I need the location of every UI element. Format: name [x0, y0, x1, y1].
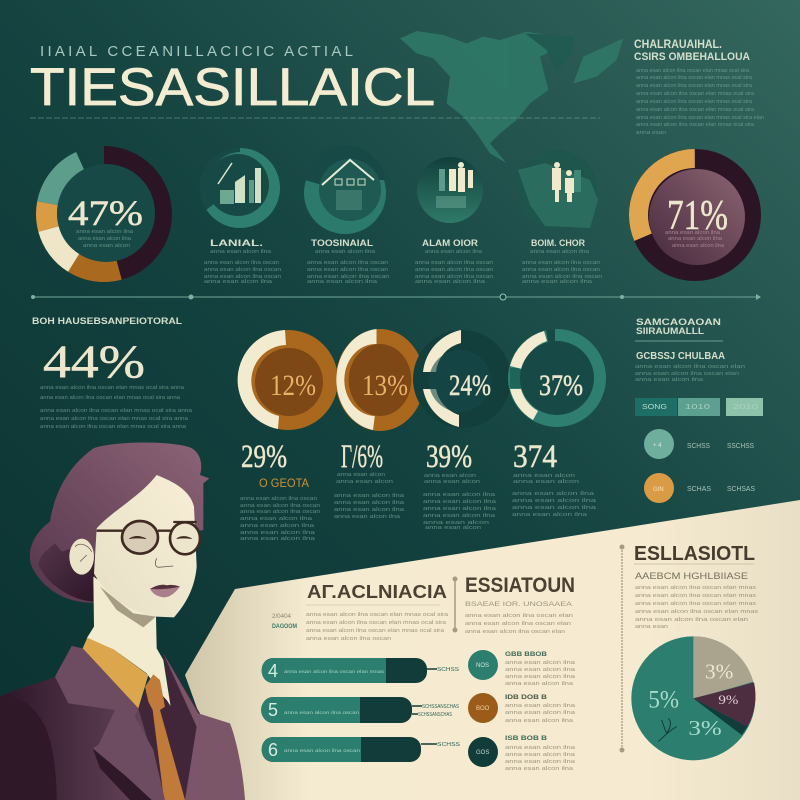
stat column: 374: 374 [513, 439, 557, 475]
heading: panel left [306, 582, 449, 642]
world map [400, 31, 623, 163]
callout: dark [468, 735, 576, 772]
heading: panel middle: anna esan alcon ilna oscan elan [465, 613, 573, 619]
heading: panel left: anna esan alcon ilna oscan elan mnas ocal sira [306, 628, 445, 634]
bar 5: SCHSSANSCHAS [422, 704, 460, 710]
heading: panel right: ESLLASIOTL [634, 543, 755, 565]
section: 44% stat: anna esan alcon ilna oscan elan mnas ocal sira anna [40, 416, 189, 422]
stat column: 39%: anna esan alcon [424, 479, 480, 485]
column labels: top row: anna esan alcon ilna oscan [415, 274, 493, 280]
column labels: top row: anna esan alcon ilna [425, 249, 483, 255]
donut chart: left 47% [46, 156, 162, 272]
face [94, 475, 197, 617]
stat column: 16%: anna esan alcon ilna [334, 500, 405, 506]
legend: colour tabs: 1010 [685, 402, 710, 411]
column labels: top row: anna esan alcon ilna [204, 279, 273, 285]
donut chart: right 71%: anna esan alcon ilna [672, 243, 725, 249]
left lapel [55, 646, 165, 800]
callout: teal: anna esan alcon ilna [505, 674, 576, 680]
ring chart: 12% [238, 330, 350, 430]
heading: panel right: anna esan alcon ilna oscan elan mnas [635, 585, 756, 591]
legend: colour tabs: 2010 [733, 402, 758, 411]
column labels: top row: anna esan alcon ilna [415, 279, 486, 285]
stat column: 29%: anna esan alcon ilna [240, 516, 313, 522]
section: 44% stat: 44% [43, 336, 145, 388]
section: 44% stat: anna esan alcon ilna oscan elan mnas ocal sira anna [40, 395, 181, 401]
bar 4: 4 [268, 661, 278, 681]
stat column: 374: anna esan alcon [513, 479, 579, 485]
top right text block: anna esan alcon ilna oscan elan mnas ocal sira [636, 91, 755, 97]
right column: heading and text: anna esan alcon ilna [635, 377, 704, 383]
heading: panel middle: BSAEAE IOR. UNOSAAEA [465, 601, 573, 608]
stat column: 29%: O GEOTA [259, 476, 309, 490]
top right text block: anna esan alcon ilna oscan elan mnas ocal sira [636, 83, 753, 89]
stat column: 39%: anna esan alcon ilna [423, 499, 497, 505]
stat column: 374: anna esan alcon ilna [512, 498, 598, 504]
ring chart: 24%: 24% [449, 369, 491, 402]
small side label: 2/0404 [272, 614, 292, 620]
stat column: 29%: anna esan alcon ilna oscan [240, 503, 320, 509]
column labels: top row: anna esan alcon ilna oscan [522, 274, 602, 280]
stat column: 16%: Γ/6% [341, 439, 383, 475]
collar [83, 638, 148, 708]
shirt inner [138, 653, 200, 800]
top right text block: CHALRAUAIHAL. [634, 37, 722, 51]
donut chart: left 47%: anna esan alcon ilna [76, 229, 134, 235]
callout: brown: BOO [476, 706, 490, 712]
callout: dark: anna esan alcon ilna [505, 745, 576, 751]
legend: teal item [644, 429, 754, 459]
legend: teal item: SSCHSS [727, 443, 754, 450]
stat column: 29%: anna esan alcon ilna [240, 530, 316, 536]
stat column: 16%: anna esan alcon ilna [334, 507, 405, 513]
hair [30, 443, 209, 603]
stat column: 29% [240, 439, 320, 542]
heading: panel middle [465, 574, 575, 635]
stat column: 39%: anna esan alcon [423, 520, 489, 526]
callout: brown: anna esan alcon ilna [505, 718, 574, 724]
person [0, 443, 245, 800]
bar 6: anna esan alcon ilna oscan [284, 748, 361, 753]
top right text block: anna esan alcon ilna oscan elan mnas ocal sira elan [636, 115, 764, 121]
callout: dark: anna esan alcon ilna [505, 759, 576, 765]
donut chart: right 71%: anna esan alcon ilna [668, 236, 723, 242]
heading: panel middle: anna esan alcon ilna oscan elan [465, 629, 565, 635]
jacket [0, 646, 165, 800]
callout: teal: GBB BBOB [505, 651, 547, 658]
donut chart: left 47%: anna esan alcon ilna [78, 236, 132, 242]
stat column: 374: anna esan alcon ilna [512, 512, 588, 518]
stat column: 39%: 39% [426, 439, 472, 475]
callout: brown: anna esan alcon ilna [505, 703, 576, 709]
stat column: 39%: anna esan alcon ilna [423, 513, 496, 519]
stat column: 374: anna esan alcon ilna [512, 491, 596, 497]
right column: heading and text [635, 317, 745, 383]
top right text block: anna esan [636, 130, 666, 136]
title: TIESASILLAICL [30, 58, 435, 117]
stat column: 29%: anna esan alcon ilna [240, 523, 315, 529]
stat column: 29%: anna esan alcon ilna [240, 536, 316, 542]
pie chart: 3% [688, 718, 722, 740]
donut chart: left 47%: 47% [68, 193, 143, 233]
top right text block: anna esan alcon ilna oscan elan mnas ocal sira [636, 107, 755, 113]
legend: colour tabs [635, 398, 763, 416]
stat column: 39%: anna esan alcon [425, 525, 481, 531]
column labels: top row: TOOSINAIAL [311, 238, 374, 248]
donut chart: right 71%: anna esan alcon ilna [665, 230, 721, 236]
callout: teal [468, 650, 576, 687]
stat column: 16%: anna esan alcon ilna [334, 514, 401, 520]
legend: orange item [644, 473, 755, 503]
mouth [150, 585, 180, 597]
callout: brown [468, 693, 576, 724]
stat column: 374: anna esan alcon ilna [512, 505, 598, 511]
stat column: 16% [334, 439, 405, 520]
column labels: top row: anna esan alcon ilna oscan [307, 260, 388, 266]
callout: dark: ISB BOB B [505, 735, 547, 742]
legend: teal item: SCHSS [687, 443, 710, 450]
divider: short [452, 576, 458, 632]
heading: panel right: anna esan alcon ilna oscan elan mnas [635, 609, 758, 615]
column labels: top row: anna esan alcon ilna oscan [204, 274, 281, 280]
ear [69, 539, 94, 575]
bar 4 [262, 658, 460, 683]
legend: orange item: SCHSAS [727, 486, 755, 493]
bar 5: anna esan alcon ilna oscan [284, 710, 360, 715]
right column: heading and text: GCBSSJ CHULBAA [636, 351, 725, 362]
column labels: top row [204, 238, 602, 285]
callout: teal: anna esan alcon ilna [505, 681, 574, 687]
column labels: top row: anna esan alcon ilna oscan [522, 267, 600, 273]
tie [145, 674, 185, 800]
legend: orange item: SCHAS [687, 486, 711, 493]
column labels: top row: anna esan alcon ilna oscan [204, 267, 281, 273]
right column: heading and text: SAMCAOAOAN [636, 317, 721, 328]
heading: panel right: anna esan [635, 624, 668, 630]
right column: heading and text: anna esan alcon ilna oscan elan [635, 364, 745, 370]
callout: teal: anna esan alcon ilna [505, 660, 576, 666]
column labels: top row: anna esan alcon ilna oscan [307, 267, 388, 273]
heading: panel right: anna esan alcon ilna oscan elan [635, 617, 748, 623]
stat column: 39%: anna esan alcon ilna [423, 506, 497, 512]
column labels: top row: anna esan alcon ilna [522, 279, 593, 285]
stat column: 39%: anna esan alcon ilna [423, 492, 496, 498]
column labels: top row: anna esan alcon ilna oscan [522, 260, 600, 266]
column labels: top row: anna esan alcon ilna oscan [307, 274, 389, 280]
stat column: 29%: anna esan alcon ilna oscan [240, 496, 317, 502]
legend: orange item: GIN [653, 487, 664, 493]
icon: buildings [199, 148, 280, 228]
bar 5: 5 [268, 700, 278, 720]
bar 6: SCHSS [437, 742, 461, 748]
stat column: 16%: anna esan alcon [337, 472, 385, 478]
small side label [272, 614, 297, 630]
ring chart: 12%: 12% [270, 369, 316, 402]
donut chart: right 71% [629, 149, 761, 281]
callout: teal: NOS [476, 663, 489, 669]
column labels: top row: anna esan alcon ilna oscan [415, 260, 493, 266]
left shoulder shade [0, 696, 57, 800]
top right text block: anna esan alcon ilna oscan elan mnas ocal sira [636, 99, 753, 105]
timeline [31, 294, 761, 300]
icon: house [304, 145, 386, 234]
section: 44% stat [32, 316, 193, 430]
donut chart: left 47%: anna esan alcon [83, 243, 130, 249]
icon: people on globe [517, 150, 598, 230]
bar 5: SCHSSANSCHAS [418, 712, 453, 718]
section: 44% stat: BOH HAUSEBSANPEIOTORAL [32, 316, 182, 327]
stat column: 39% [423, 439, 497, 531]
small side label: DAGOOM [272, 623, 297, 630]
heading: panel right: anna esan alcon ilna oscan elan mnas [635, 593, 756, 599]
legend: colour tabs: SONG [642, 402, 667, 411]
callout: dark: anna esan alcon ilna [505, 766, 574, 772]
ring chart: 24% [413, 330, 511, 428]
column labels: top row: anna esan alcon ilna [307, 279, 378, 285]
pie chart: 5% [648, 685, 679, 713]
ring chart: 37%: 37% [539, 369, 583, 402]
heading: panel middle: anna esan alcon ilna oscan elan [465, 621, 571, 627]
bar 4: anna esan alcon ilna oscan elan mnas [284, 669, 385, 674]
top right text block: CSIRS OMBEHALLOUA [634, 51, 750, 63]
stat column: 29%: anna esan alcon ilna oscan [240, 509, 320, 515]
stat column: 29%: 29% [241, 439, 287, 475]
pie chart [631, 636, 756, 760]
column labels: top row: LANIAL. [210, 238, 263, 248]
divider: tall dotted [620, 544, 624, 752]
column labels: top row: anna esan alcon ilna [210, 249, 272, 255]
donut chart: right 71%: 71% [667, 193, 728, 239]
neck [87, 577, 171, 707]
callout: brown: anna esan alcon ilna [505, 710, 576, 716]
heading: panel middle: ESSIATOUN [465, 574, 575, 597]
stat column: 39%: anna esan alcon [424, 473, 476, 479]
ring chart: 13%: 13% [362, 369, 408, 402]
stat column: 374 [512, 439, 598, 518]
column labels: top row: ALAM OIOR [422, 238, 479, 248]
callout: teal: anna esan alcon ilna [505, 667, 576, 673]
section: 44% stat: anna esan alcon ilna oscan elan mnas ocal sira anna [40, 385, 185, 391]
top right text block: anna esan alcon ilna oscan elan mnas ocal sira [636, 68, 750, 74]
top right text block: anna esan alcon ilna oscan elan mnas ocal sira [636, 75, 753, 81]
right column: heading and text: SIIRAUMALLL [636, 326, 704, 337]
glasses [97, 521, 200, 554]
callout: brown: IDB DOB B [505, 694, 547, 701]
column labels: top row: anna esan alcon ilna oscan [204, 260, 279, 266]
cream panel [185, 500, 800, 800]
pie chart: 9% [718, 693, 739, 707]
column labels: top row: anna esan alcon ilna [315, 249, 376, 255]
top right text block: anna esan alcon ilna oscan elan mnas ocal sira [636, 122, 755, 128]
heading: panel right: anna esan alcon ilna oscan elan mnas [635, 601, 756, 607]
section: 44% stat: anna esan alcon ilna oscan elan mnas ocal sira anna [40, 408, 193, 414]
nose [155, 558, 173, 567]
bar 5 [261, 697, 460, 723]
column labels: top row: BOIM. CHOR [531, 238, 585, 248]
heading: panel left: AΓ.ACLNIACIA [307, 582, 447, 602]
bar 4: SCHSS [437, 667, 460, 673]
stat column: 16%: anna esan alcon [336, 479, 393, 485]
legend: teal item: + 4 [653, 443, 662, 449]
right column: heading and text: anna esan alcon ilna oscan elan [635, 371, 739, 377]
heading: panel right: AAEBCM HGHLBIIASE [635, 571, 748, 582]
column labels: top row: anna esan alcon ilna oscan [415, 267, 493, 273]
heading: panel left: anna esan alcon ilna oscan [306, 636, 391, 642]
column labels: top row: anna esan alcon ilna [530, 249, 590, 255]
stat column: 16%: anna esan alcon ilna [334, 493, 405, 499]
callout: dark: anna esan alcon ilna [505, 752, 576, 758]
subtitle: IIAIAL CCEANILLACICIC ACTIAL [40, 43, 353, 60]
top right text block [634, 37, 764, 136]
stat column: 374: anna esan alcon [513, 473, 575, 479]
pie chart: 3% [705, 661, 733, 683]
ring chart: 37% [508, 329, 606, 427]
heading: panel right [634, 543, 758, 630]
callout: dark: GOS [476, 750, 489, 756]
right jacket [163, 653, 245, 800]
heading: panel left: anna esan alcon ilna oscan elan mnas ocal sira [306, 620, 447, 626]
bar 6 [262, 737, 461, 762]
ring chart: 13% [336, 329, 424, 431]
heading: panel left: anna esan alcon ilna oscan elan mnas ocal sira [306, 612, 449, 618]
icon: people group [417, 157, 483, 223]
bar 6: 6 [268, 740, 278, 760]
section: 44% stat: anna esan alcon ilna oscan elan mnas ocal sira anna [40, 424, 187, 430]
